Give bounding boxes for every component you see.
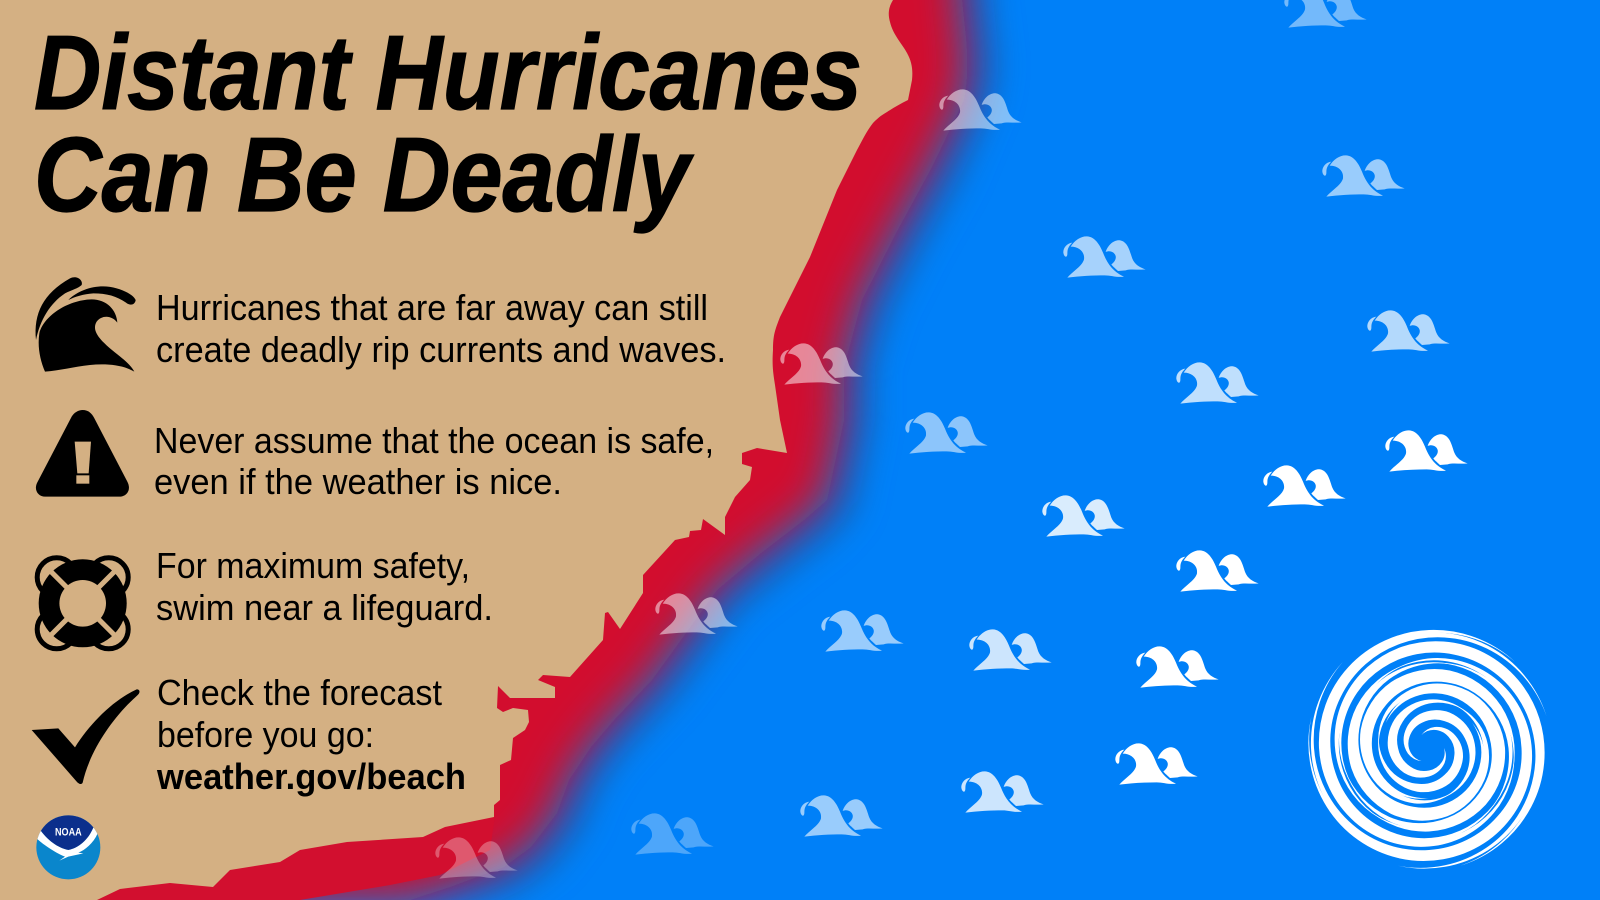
sandy beach land: [0, 0, 912, 900]
title: Can Be Deadly: [34, 116, 694, 234]
wave 7: [1176, 362, 1259, 404]
text: ocean safety: Never assume that the ocean is safe,: [154, 420, 714, 461]
wave 8: [905, 412, 988, 454]
wave 4: [1063, 236, 1146, 278]
wave 12: [1176, 550, 1259, 592]
wave 11: [1042, 495, 1125, 537]
title: Distant Hurricanes: [34, 14, 862, 132]
icon: hurricane swirl: [1284, 591, 1586, 900]
wave 1: [1284, 0, 1367, 28]
text: rip currents: [156, 287, 726, 370]
wave 9: [1385, 430, 1468, 472]
deep water halo along shore: [0, 0, 999, 900]
icon: checkmark: [32, 689, 139, 784]
wave 17: [1115, 743, 1198, 785]
text: rip currents: create deadly rip currents and waves.: [156, 329, 726, 370]
red rip current surf band: [0, 0, 969, 900]
solid red shore base: [0, 780, 500, 900]
text: ocean safety: even if the weather is nice.: [154, 461, 562, 502]
wave 2: [939, 89, 1022, 131]
wave 20: [631, 813, 714, 855]
wave 6: [780, 343, 863, 385]
wave 10: [1263, 465, 1346, 507]
text: check the forecast: [156, 672, 466, 797]
icon: NOAA logo: [33, 813, 103, 879]
text: check the forecast: Check the forecast: [157, 672, 442, 713]
icon: warning triangle: [36, 410, 129, 497]
wave 13: [655, 593, 738, 635]
text: lifeguard: For maximum safety,: [156, 545, 470, 586]
text: rip currents: Hurricanes that are far away can still: [156, 287, 708, 328]
text: check the forecast: weather.gov/beach: [156, 756, 466, 797]
text: ocean safety: [154, 420, 714, 502]
icon: wave: [36, 277, 136, 372]
text: lifeguard: [156, 545, 493, 628]
wave 14: [821, 610, 904, 652]
text: lifeguard: swim near a lifeguard.: [156, 587, 493, 628]
icon: life preserver: [37, 558, 128, 649]
title: [34, 14, 862, 234]
wave 3: [1322, 155, 1405, 197]
text: check the forecast: before you go:: [157, 714, 374, 755]
wave 19: [800, 795, 883, 837]
icon: NOAA logo: NOAA: [55, 827, 82, 839]
wave 15: [969, 629, 1052, 671]
wave 5: [1367, 310, 1450, 352]
wave 21: [435, 837, 518, 879]
wave 18: [961, 771, 1044, 813]
wave field: [435, 0, 1468, 879]
wave 16: [1136, 646, 1219, 688]
